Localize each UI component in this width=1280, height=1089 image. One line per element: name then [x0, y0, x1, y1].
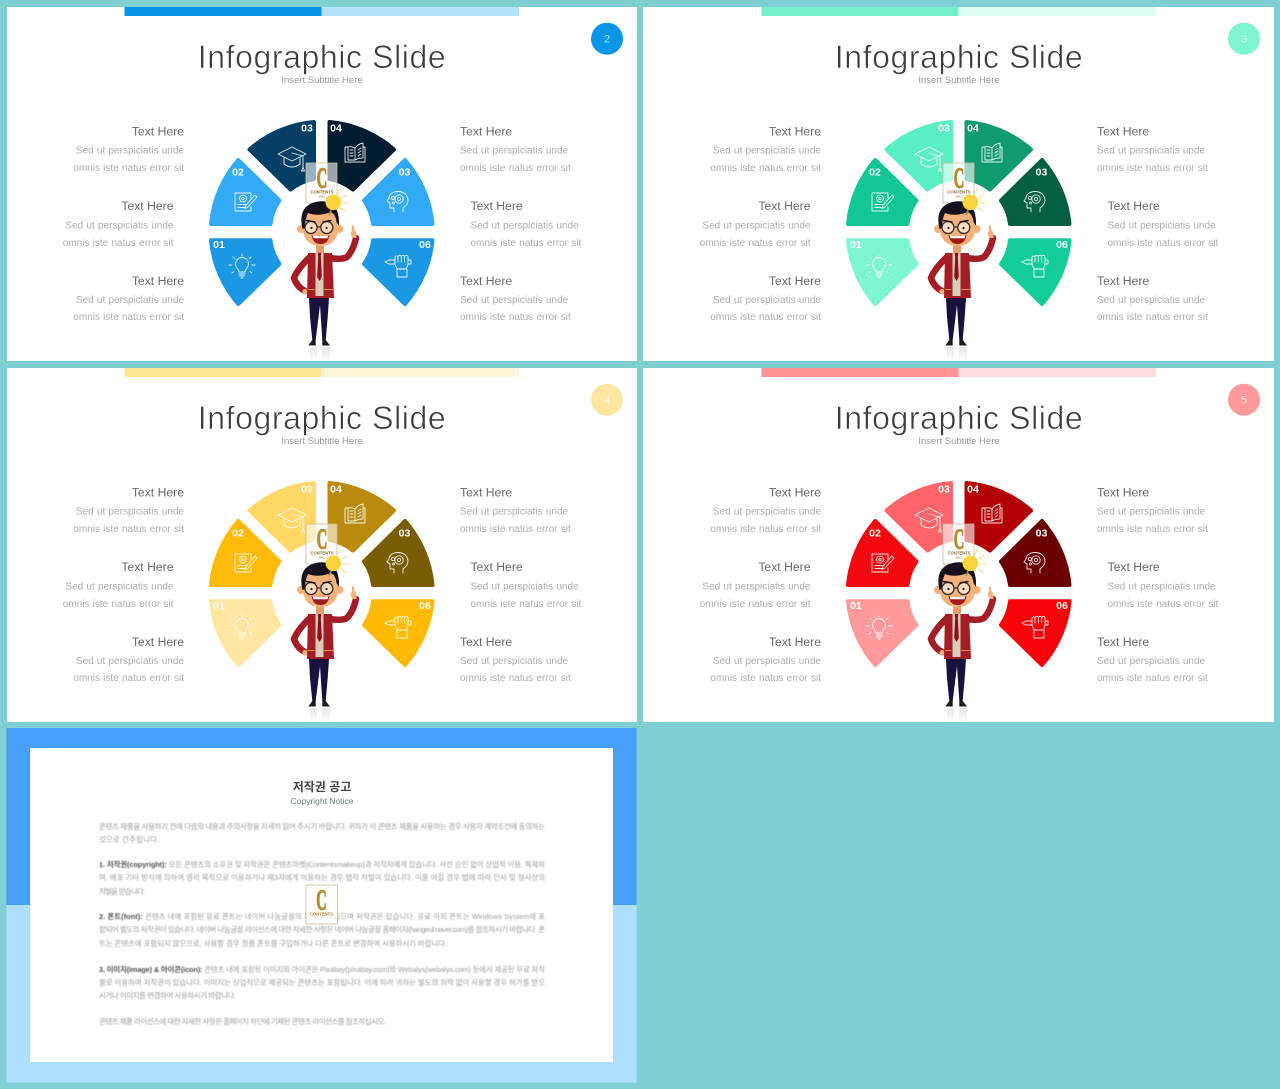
segment 03 left: 03	[301, 122, 313, 134]
notice body text: 시거나 이미지를 변경하여 사용하시기 바랍니다.	[99, 991, 236, 1000]
watermark logo: MALL	[319, 194, 326, 198]
page number badge: 4	[604, 394, 610, 406]
text block left 3: Sed ut perspiciatis unde	[76, 656, 184, 667]
text block right 3: omnis iste natus error sit	[460, 673, 571, 684]
subtitle: Insert Subtitle Here	[281, 75, 363, 86]
text block right 2: Text Here	[1108, 560, 1160, 574]
watermark logo	[306, 524, 337, 564]
segment 06: 06	[419, 239, 431, 251]
text block left 1	[73, 486, 184, 535]
watermark logo	[943, 524, 974, 564]
text block right 2: Sed ut perspiciatis unde	[1108, 220, 1216, 232]
notice body text: 3. 이미지(image) & 아이콘(icon): 콘텐츠 내에 포함된 이미지와 아이콘은 Pixabay(pixabay.com)와 Webalys(webalys.com) 등에서 제공된 무료 저작	[99, 965, 545, 974]
watermark logo: CONTENTS	[310, 912, 333, 916]
text block right 1: Text Here	[1097, 124, 1149, 138]
segment 02	[211, 521, 280, 585]
panel: yellow slide	[7, 368, 637, 722]
text block left 2: Text Here	[758, 560, 811, 574]
page number badge	[591, 23, 623, 55]
text block left 1	[73, 124, 184, 174]
watermark logo: CONTENTS	[310, 550, 334, 556]
watermark logo: CONTENTS	[947, 190, 971, 194]
text block left 1: omnis iste natus error sit	[710, 163, 821, 174]
segment 04: 04	[330, 122, 342, 134]
text block left 3: Text Here	[132, 274, 184, 288]
segment 01: 01	[850, 239, 862, 251]
text block left 3: Text Here	[132, 635, 184, 649]
text block right 2: Text Here	[1108, 199, 1160, 213]
text block left 2: Sed ut perspiciatis unde	[702, 220, 811, 232]
segment 03 left: 03	[301, 484, 313, 496]
text block left 2: Text Here	[121, 199, 174, 213]
title: Infographic Slide	[835, 39, 1083, 75]
notice body text: 2. 폰트(font): 콘텐츠 내에 포함된 유료 폰트는 네이버 나눔글꼴의 저작권이 있으며 저작권은 있습니다. 유료 이외 폰트는 Windows System에 포	[99, 912, 545, 921]
top colour bar	[762, 368, 1156, 377]
text block right 1: Text Here	[460, 124, 512, 138]
segment 06: 06	[1056, 239, 1068, 251]
segment 03 right	[364, 521, 432, 585]
segment 03 right: 03	[1036, 528, 1047, 540]
text block right 1: Sed ut perspiciatis unde	[460, 146, 569, 156]
text block right 3: Sed ut perspiciatis unde	[460, 295, 569, 306]
text block left 1	[710, 486, 821, 535]
watermark logo: C	[317, 164, 327, 194]
text block right 1	[1097, 486, 1208, 535]
segment 03 right	[364, 160, 432, 224]
character	[294, 549, 357, 722]
top colour bar	[124, 368, 519, 377]
segment 02	[848, 521, 916, 585]
text block left 2	[63, 199, 174, 249]
text block left 1: Text Here	[132, 486, 184, 500]
text block right 2: Text Here	[470, 199, 523, 213]
notice body text: 1. 저작권(copyright): 모든 콘텐츠의 소유권 및 저작권은 콘텐츠마켓(Contentsmakeup)과 저작자에게 있습니다. 사전 승인 없이 상업적 이용, 복제하	[99, 860, 545, 869]
text block right 3: omnis iste natus error sit	[1097, 312, 1208, 323]
text block right 2: Sed ut perspiciatis unde	[470, 220, 579, 232]
segment 03 left: 03	[938, 484, 950, 496]
character	[294, 188, 357, 361]
watermark logo: C	[954, 524, 964, 556]
segment 01	[211, 239, 280, 304]
page number badge	[591, 384, 623, 416]
page number badge	[1228, 23, 1260, 55]
text block left 3: omnis iste natus error sit	[710, 673, 821, 684]
text block right 2: omnis iste natus error sit	[1108, 599, 1218, 610]
watermark logo	[306, 163, 337, 203]
text block right 2	[470, 199, 581, 249]
segment 02: 02	[869, 166, 881, 178]
text block left 3: Text Here	[769, 635, 821, 649]
text block right 3: Sed ut perspiciatis unde	[460, 656, 569, 667]
text block right 3	[1097, 274, 1208, 323]
text block left 2: omnis iste natus error sit	[700, 599, 811, 610]
watermark logo: MALL	[956, 194, 963, 198]
text block left 1: Text Here	[769, 486, 821, 500]
segment 06	[364, 600, 432, 665]
segment 02: 02	[232, 528, 244, 540]
text block left 1: Sed ut perspiciatis unde	[713, 506, 821, 518]
watermark logo: C	[317, 524, 327, 556]
segment 04	[330, 483, 394, 550]
text block left 2	[63, 560, 174, 610]
text block left 3: Sed ut perspiciatis unde	[76, 295, 184, 306]
watermark logo: C	[954, 164, 964, 194]
text block left 3: omnis iste natus error sit	[73, 673, 184, 684]
panel: red slide	[643, 368, 1274, 722]
text block left 3	[710, 635, 821, 684]
text block right 1: omnis iste natus error sit	[460, 524, 571, 535]
text block left 1: Sed ut perspiciatis unde	[76, 146, 184, 156]
text block right 1: Sed ut perspiciatis unde	[1097, 506, 1206, 518]
notice body text: 콘텐츠 제품 라이선스에 대한 자세한 사항은 홈페이지 하단에 기재된 콘텐츠 라이선스를 참조하십시오.	[99, 1017, 386, 1026]
text block left 1: Text Here	[132, 124, 184, 138]
segment 04	[966, 122, 1031, 190]
text block left 3	[73, 274, 184, 323]
panel: green slide	[643, 7, 1274, 361]
notice heading: 저작권 공고	[293, 779, 351, 794]
text block right 1: omnis iste natus error sit	[1097, 524, 1208, 535]
notice body text: 콘텐츠 제품을 사용하기 전에 다음의 내용과 주의사항을 자세히 읽어 주시기 바랍니다. 귀하가 이 콘텐츠 제품을 사용하는 경우 사용자 계약조건에 동의하는	[99, 822, 545, 831]
segment 03 left	[250, 483, 314, 550]
subtitle: Insert Subtitle Here	[281, 436, 363, 447]
text block left 1: Text Here	[769, 124, 821, 138]
text block right 3: Text Here	[460, 635, 512, 649]
text block left 2: Sed ut perspiciatis unde	[65, 220, 174, 232]
text block left 3: Text Here	[769, 274, 821, 288]
notice body text: 함되어 별도의 저작권이 있습니다. 네이버 나눔글꼴 라이선스에 대한 자세한 사항은 네이버 나눔글꼴 홈페이지(hangeul.naver.com)를 참조하시기 바랍니다. 폰	[99, 925, 545, 934]
page number badge: 5	[1241, 394, 1247, 406]
segment 04: 04	[967, 122, 979, 134]
notice body text: 트는 콘텐츠에 포함되지 않으므로, 사용할 경우 정품 폰트를 구입하거나 다른 폰트로 변경하여 사용하시기 바랍니다.	[99, 939, 447, 948]
text block right 3: Text Here	[460, 274, 512, 288]
text block right 1	[460, 124, 571, 174]
text block left 3: omnis iste natus error sit	[73, 312, 184, 323]
text block right 3	[1097, 635, 1208, 684]
top colour bar	[124, 7, 519, 16]
segment 06	[364, 239, 432, 304]
text block right 1: Sed ut perspiciatis unde	[1097, 146, 1206, 156]
subtitle: Insert Subtitle Here	[918, 75, 1000, 86]
character	[931, 549, 994, 722]
segment 01: 01	[850, 600, 862, 612]
text block right 1: omnis iste natus error sit	[1097, 163, 1208, 174]
text block left 2	[700, 199, 811, 249]
title: Infographic Slide	[198, 39, 446, 75]
notice body text: 처벌을 받습니다.	[99, 887, 145, 896]
text block left 1: Sed ut perspiciatis unde	[76, 506, 184, 518]
panel: copyright notice	[6, 728, 636, 1082]
text block left 2	[700, 560, 811, 610]
segment 03 right	[1001, 160, 1070, 224]
notice body text: 것으로 간주됩니다.	[99, 835, 159, 844]
text block left 3	[710, 274, 821, 323]
segment 06	[1001, 239, 1070, 304]
text block right 1: Text Here	[1097, 486, 1149, 500]
character	[931, 188, 994, 361]
watermark logo: C	[316, 886, 327, 916]
segment 06: 06	[419, 600, 431, 612]
text block right 1: omnis iste natus error sit	[460, 163, 571, 174]
segment 02: 02	[232, 166, 244, 178]
segment 04	[330, 122, 394, 190]
title: Infographic Slide	[198, 400, 446, 436]
text block right 1: Sed ut perspiciatis unde	[460, 506, 569, 518]
text block right 2: Sed ut perspiciatis unde	[470, 582, 579, 592]
text block right 1: Text Here	[460, 486, 512, 500]
notice body text	[99, 822, 545, 1026]
panel: blue slide	[7, 7, 637, 361]
text block left 3: omnis iste natus error sit	[710, 312, 821, 323]
notice body text: 물로 이용하며 저작권이 있습니다. 이미지는 상업적으로 제공되는 콘텐츠는 포함됩니다. 이에 따라 귀하는 별도의 허락 없이 사용할 경우 허가를 받으	[99, 978, 545, 987]
text block left 1: omnis iste natus error sit	[710, 524, 821, 535]
page number badge: 2	[604, 34, 610, 46]
text block left 3: Sed ut perspiciatis unde	[713, 656, 821, 667]
segment 02	[848, 160, 916, 224]
segment 01: 01	[213, 600, 225, 612]
text block right 2: omnis iste natus error sit	[1108, 238, 1218, 249]
segment 04: 04	[967, 484, 979, 496]
segment 01	[848, 600, 916, 665]
text block right 2: Text Here	[470, 560, 523, 574]
segment 03 left	[886, 483, 951, 550]
notice subheading: Copyright Notice	[291, 796, 354, 806]
text block right 3: omnis iste natus error sit	[460, 312, 571, 323]
notice body text: 며, 배포 기타 방식에 의하여 영리 목적으로 이용하거나 제3자에게 이용하는 경우 법적 처벌이 있습니다. 이를 어길 경우 법에 따라 민사 및 형사상의	[99, 873, 545, 882]
watermark logo: MALL	[319, 556, 326, 560]
text block right 3: Text Here	[1097, 274, 1149, 288]
text block right 3: Sed ut perspiciatis unde	[1097, 295, 1206, 306]
text block right 2: omnis iste natus error sit	[470, 599, 581, 610]
text block left 2: Text Here	[121, 560, 174, 574]
text block left 2: omnis iste natus error sit	[63, 599, 174, 610]
segment 03 right: 03	[399, 166, 410, 178]
text block right 3: Sed ut perspiciatis unde	[1097, 656, 1206, 667]
text block right 3	[460, 635, 571, 684]
segment 03 left: 03	[938, 122, 950, 134]
text block left 2: omnis iste natus error sit	[63, 238, 174, 249]
watermark logo: MALL	[956, 556, 963, 560]
segment 04: 04	[330, 484, 342, 496]
text block right 2	[1108, 560, 1218, 610]
text block right 2: omnis iste natus error sit	[470, 238, 581, 249]
text block right 1	[460, 486, 571, 535]
text block right 2	[1108, 199, 1218, 249]
watermark logo	[943, 163, 974, 203]
text block left 2: Text Here	[758, 199, 811, 213]
segment 06: 06	[1056, 600, 1068, 612]
text block right 3	[460, 274, 571, 323]
text block left 3	[73, 635, 184, 684]
segment 03 left	[250, 122, 314, 190]
title: Infographic Slide	[835, 400, 1083, 436]
text block left 2: omnis iste natus error sit	[700, 238, 811, 249]
text block right 3: Text Here	[1097, 635, 1149, 649]
page number badge: 3	[1241, 34, 1247, 46]
text block right 2: Sed ut perspiciatis unde	[1108, 582, 1216, 592]
watermark logo: CONTENTS	[310, 190, 334, 194]
page number badge	[1228, 384, 1260, 416]
text block left 1: omnis iste natus error sit	[73, 163, 184, 174]
subtitle: Insert Subtitle Here	[918, 436, 1000, 447]
segment 02: 02	[869, 528, 881, 540]
segment 03 right: 03	[399, 528, 410, 540]
segment 03 right	[1001, 521, 1070, 585]
watermark logo: CONTENTS	[947, 550, 971, 556]
text block left 1: omnis iste natus error sit	[73, 524, 184, 535]
text block right 2	[470, 560, 581, 610]
top colour bar	[762, 7, 1156, 16]
text block right 3: omnis iste natus error sit	[1097, 673, 1208, 684]
text block left 1	[710, 124, 821, 174]
text block left 1: Sed ut perspiciatis unde	[713, 146, 821, 156]
text block left 2: Sed ut perspiciatis unde	[702, 582, 811, 592]
text block left 2: Sed ut perspiciatis unde	[65, 582, 174, 592]
segment 02	[211, 160, 280, 224]
watermark logo	[306, 885, 338, 924]
segment 01: 01	[213, 239, 225, 251]
segment 03 right: 03	[1036, 166, 1047, 178]
segment 04	[966, 483, 1031, 550]
text block left 3: Sed ut perspiciatis unde	[713, 295, 821, 306]
segment 06	[1001, 600, 1070, 665]
segment 01	[848, 239, 916, 304]
text block right 1	[1097, 124, 1208, 174]
segment 01	[211, 600, 280, 665]
segment 03 left	[886, 122, 951, 190]
